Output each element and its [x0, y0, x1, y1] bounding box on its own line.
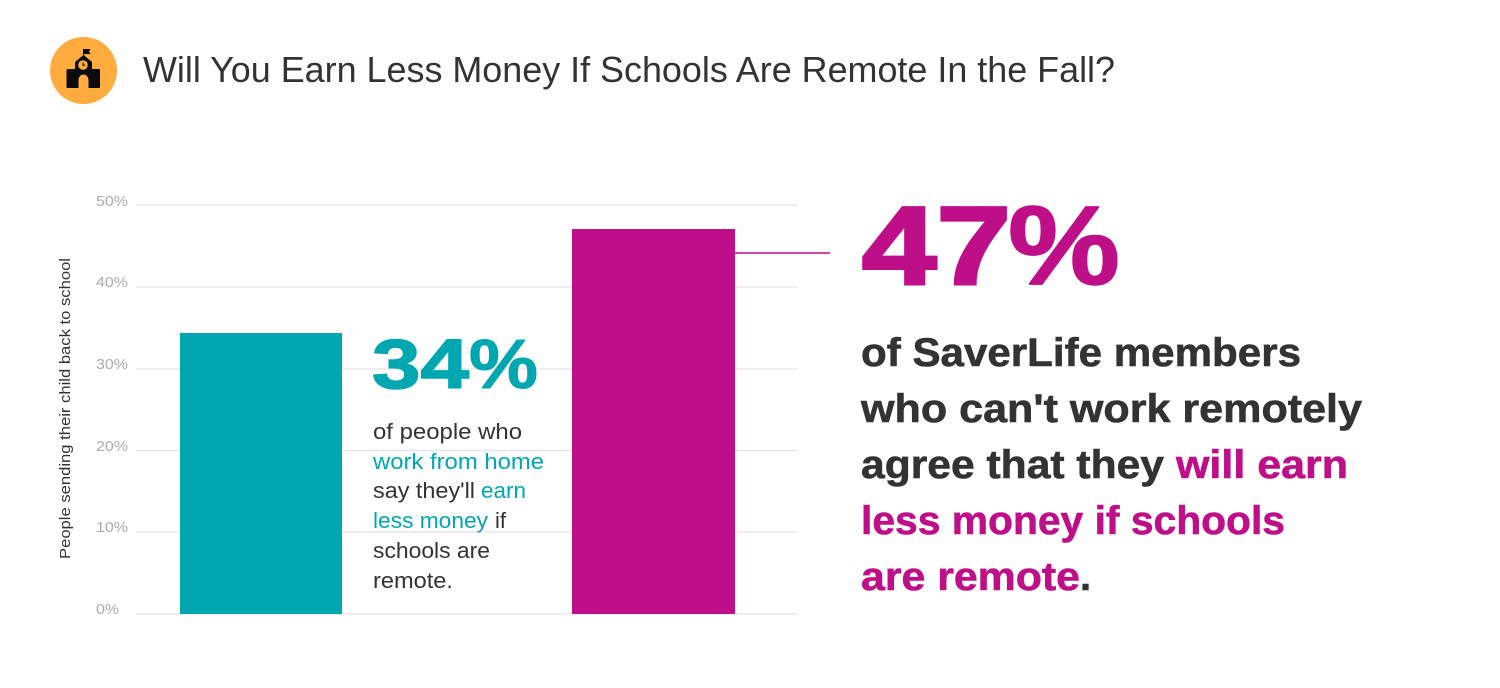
description: of people who — [373, 419, 522, 444]
stat: 34% — [372, 325, 538, 403]
description: earn — [481, 478, 526, 503]
description: . — [1080, 555, 1091, 599]
y-axis tick labels: 30% — [96, 357, 128, 373]
description: less money if schools — [861, 499, 1285, 543]
leader line — [735, 252, 830, 254]
y-axis tick labels: 20% — [96, 439, 128, 455]
callout: 47% — [860, 183, 1363, 599]
stat: 47%: 47 — [862, 184, 1011, 308]
icon: school badge — [50, 37, 117, 104]
stat: 34%: % — [469, 325, 538, 403]
y-axis title: People sending their child back to school — [57, 258, 74, 559]
title: Will You Earn Less Money If Schools Are Remote In the Fall? — [143, 49, 1115, 90]
description: who can't work remotely — [860, 387, 1363, 431]
description — [860, 331, 1363, 599]
y-axis tick labels: 10% — [96, 520, 128, 536]
stat: 34%: 34 — [372, 325, 469, 403]
callout: 34% — [366, 325, 552, 595]
bar: work from home 34% — [180, 333, 342, 614]
description: if — [495, 508, 507, 533]
description — [372, 419, 544, 593]
y-axis gridlines — [136, 205, 798, 614]
y-axis tick labels — [96, 194, 128, 618]
description: of SaverLife members — [861, 331, 1301, 375]
description: work from home — [372, 449, 544, 474]
description: will earn — [1175, 443, 1348, 487]
bar chart — [57, 194, 830, 618]
description: schools are — [373, 538, 490, 563]
y-axis tick labels: 0% — [96, 602, 119, 618]
description: are remote — [861, 555, 1080, 599]
y-axis tick labels: 40% — [96, 275, 128, 291]
y-axis tick labels: 50% — [96, 194, 128, 210]
stat: 47% — [862, 183, 1120, 308]
description: remote. — [373, 568, 453, 593]
description: say they'll — [373, 478, 475, 503]
description: agree that they — [861, 443, 1165, 487]
description: less money — [373, 508, 488, 533]
bar: cannot work remotely 47% — [572, 229, 735, 614]
stat: 47%: % — [1008, 183, 1120, 308]
